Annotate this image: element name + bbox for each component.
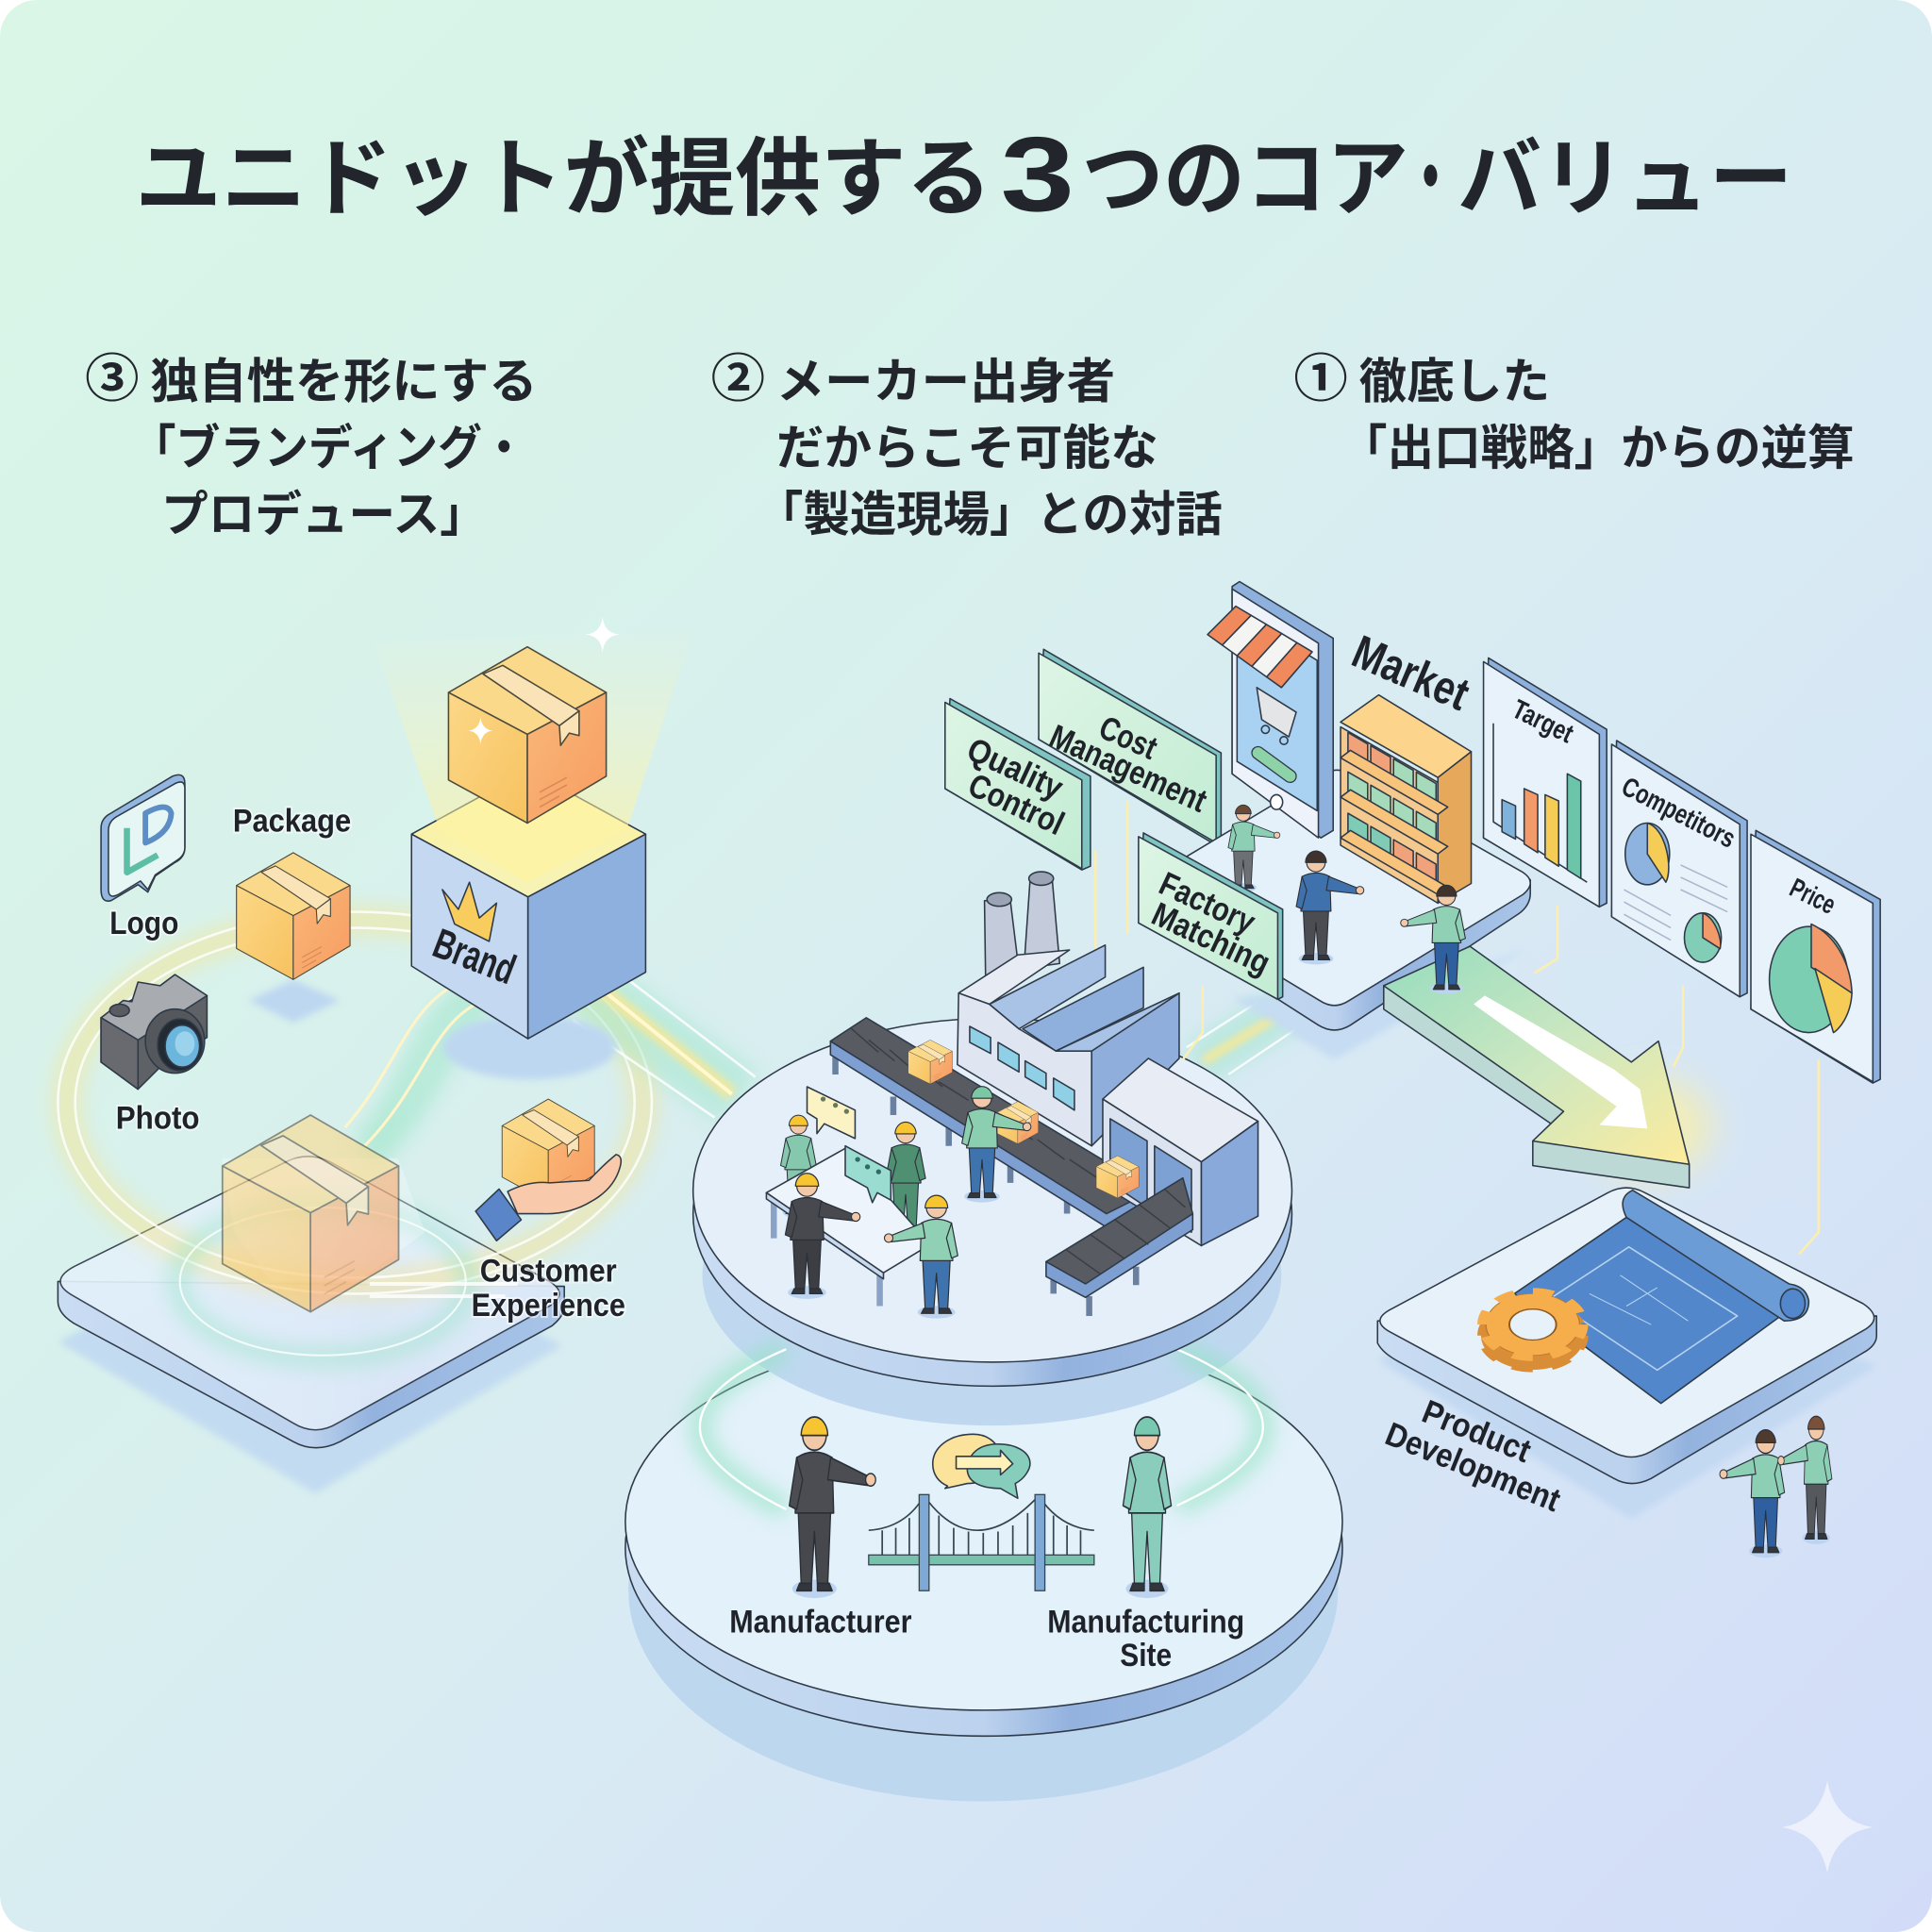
- board: Quality Control: Control: [962, 767, 1070, 842]
- heading: value 1: 「出口戦略」からの逆算: [1341, 421, 1855, 475]
- title: バリュー: [1457, 132, 1792, 227]
- heading: value 3: [85, 350, 537, 541]
- label: Manufacturing Site: Site: [1120, 1638, 1172, 1674]
- label: Customer Experience: Customer: [480, 1253, 617, 1289]
- label: Logo: Logo: [109, 906, 178, 941]
- heading: value 3: ③: [85, 350, 140, 408]
- label: Manufacturing Site: [1047, 1605, 1244, 1674]
- heading: value 2: [711, 350, 1223, 541]
- icon: logo bubble: [101, 774, 185, 901]
- top product box: [448, 647, 607, 823]
- sparkles: [468, 616, 620, 744]
- icon: crown: [442, 882, 496, 941]
- connectors to boards: [1095, 801, 1819, 1255]
- blueprint: [1514, 1191, 1808, 1404]
- label: Photo: Photo: [116, 1100, 200, 1136]
- label: Manufacturing Site: Manufacturing: [1047, 1605, 1244, 1641]
- board: Cost Management: Cost: [1093, 709, 1163, 767]
- factory building: [958, 872, 1179, 1146]
- boxes on conveyor: [908, 1040, 1139, 1198]
- board: Factory Matching: Matching: [1146, 895, 1275, 982]
- heading: value 2: だからこそ可能な: [776, 421, 1158, 475]
- light beam over brand: [375, 626, 695, 882]
- board: Factory Matching: [1139, 833, 1283, 999]
- person: site worker: [1123, 1417, 1172, 1598]
- label: Market: Market: [1345, 625, 1476, 721]
- board: Cost Management: [1039, 649, 1221, 845]
- title: 3: [1001, 114, 1074, 233]
- panel: factory disc: [693, 1019, 1291, 1386]
- panel: competitors chart: [1611, 741, 1747, 997]
- label: Product Development: Product: [1417, 1393, 1536, 1470]
- label: Brand: Brand: [427, 921, 522, 993]
- ribbon: factory to market: [1187, 1002, 1300, 1074]
- panel: competitors chart: Competitors: [1617, 772, 1740, 855]
- board: Cost Management: Management: [1044, 718, 1212, 820]
- heading: value 3: 「ブランディング・: [132, 421, 526, 475]
- person: manufacturer: [790, 1417, 875, 1598]
- heading: value 1: ①: [1293, 350, 1348, 408]
- label: Package: Package: [233, 804, 351, 840]
- heading: value 2: ②: [711, 350, 765, 408]
- icon: camera: [101, 974, 207, 1090]
- title: ユニドットが提供する: [136, 132, 991, 227]
- workers behind table: [780, 1115, 925, 1237]
- watermark sparkle: [1782, 1780, 1873, 1873]
- panel: branding platform: [58, 1157, 564, 1493]
- icon: hand with box: [475, 1099, 621, 1241]
- machine tunnel: [1103, 1058, 1258, 1245]
- speech bubbles at table: [808, 1087, 891, 1203]
- product development team: [1720, 1416, 1832, 1557]
- icon: bridge: [869, 1494, 1094, 1591]
- icon: speech bubbles: [933, 1434, 1030, 1498]
- heading: value 1: [1293, 350, 1855, 475]
- title: [136, 114, 1792, 233]
- phone storefront: [1208, 581, 1333, 838]
- second conveyor: [1046, 1178, 1192, 1297]
- brand loop: glowing ribbons: [58, 912, 652, 1357]
- icon: gear: [1485, 1292, 1581, 1367]
- retail shelf: [1341, 695, 1472, 903]
- icon: package box: [237, 853, 350, 1023]
- exit arrow: [1384, 946, 1713, 1188]
- label: Manufacturer: Manufacturer: [729, 1605, 912, 1641]
- heading: value 2: メーカー出身者: [776, 355, 1115, 408]
- meeting table: [766, 1148, 930, 1306]
- board: Quality Control: [945, 699, 1091, 870]
- label: Product Development: [1380, 1393, 1566, 1519]
- panel: product development platform: [1377, 1188, 1876, 1519]
- ribbon: brand to factory: [573, 961, 756, 1118]
- label: Customer Experience: Experience: [472, 1288, 625, 1324]
- label: Customer Experience: [472, 1253, 625, 1324]
- board: Quality Control: Quality: [961, 731, 1069, 807]
- ghost box with beam: [222, 1115, 425, 1312]
- title: ・: [1405, 132, 1457, 227]
- label: Product Development: Development: [1380, 1416, 1566, 1519]
- brand cube: [411, 770, 645, 1079]
- market shoppers: [1228, 805, 1465, 994]
- workers in front of table: [785, 1174, 958, 1319]
- board: Factory Matching: Factory: [1154, 865, 1261, 941]
- title: つのコア: [1082, 132, 1408, 227]
- person: conveyor worker: [962, 1087, 1031, 1203]
- panel: lower disc bridge: [625, 1124, 1342, 1802]
- heading: value 3: 独自性を形にする: [150, 355, 537, 408]
- heading: value 1: 徹底した: [1359, 355, 1550, 408]
- panel: target chart: [1484, 658, 1607, 907]
- panel: target chart: Target: [1507, 694, 1578, 750]
- panel: market platform: [1140, 770, 1530, 1059]
- panel: price chart: [1751, 830, 1880, 1083]
- panel: price chart: Price: [1785, 873, 1840, 921]
- heading: value 3: プロデュース」: [161, 488, 487, 541]
- heading: value 2: 「製造現場」との対話: [757, 488, 1223, 541]
- conveyor belts: [830, 1018, 1158, 1316]
